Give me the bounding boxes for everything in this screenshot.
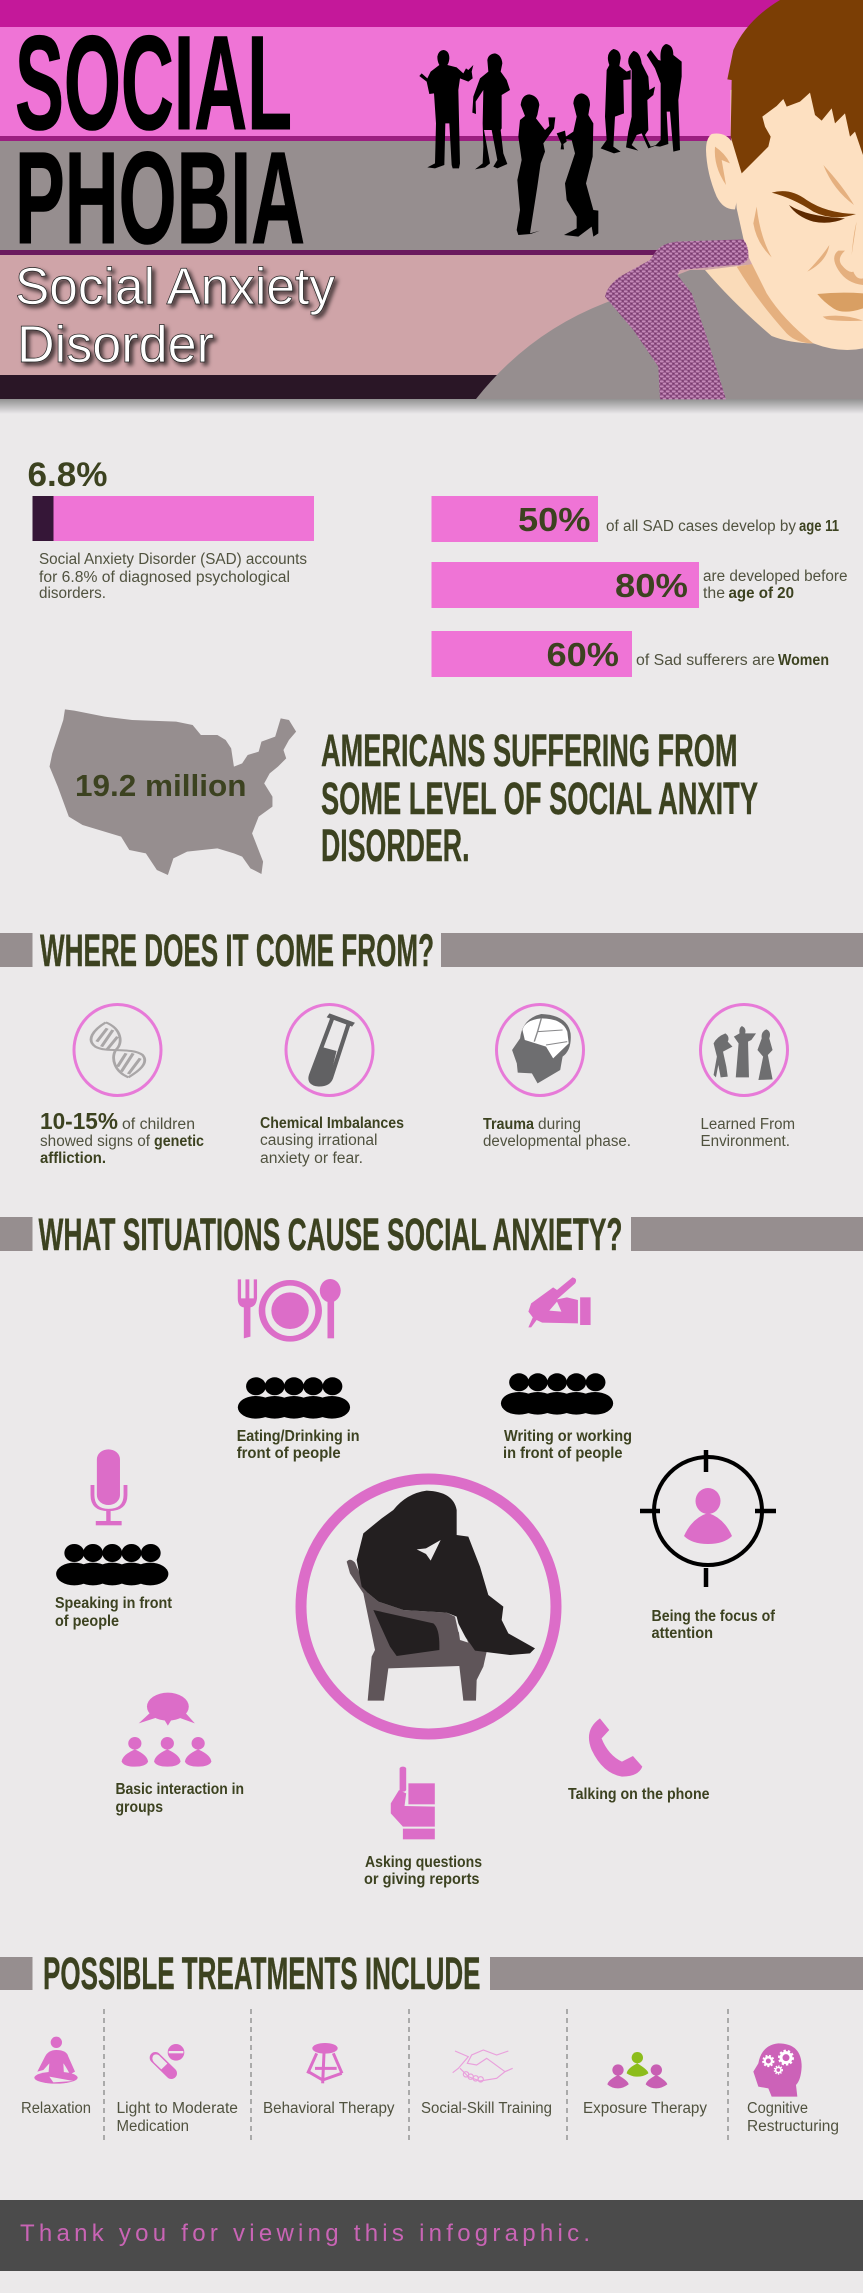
label: Talking on the phone — [568, 1786, 710, 1803]
text — [700, 1116, 795, 1150]
panel: situations — [55, 1277, 776, 1888]
cause: chemical imbalances — [260, 1004, 404, 1167]
situation: writing or working — [501, 1277, 632, 1462]
label — [364, 1854, 482, 1888]
label — [116, 2100, 238, 2135]
text: affliction. — [40, 1150, 106, 1167]
stat: 19.2 million: 19.2 million — [75, 768, 247, 803]
heading: possible treatments include: POSSIBLE TREATMENTS INCLUDE — [43, 1948, 480, 1999]
bar: 80%: the — [703, 585, 725, 602]
icon: stool — [308, 2043, 342, 2083]
label: or giving reports — [364, 1871, 480, 1888]
label: front of people — [237, 1445, 341, 1462]
text — [483, 1116, 631, 1150]
situation: asking questions — [364, 1767, 482, 1888]
icon: handshake — [453, 2050, 513, 2082]
label — [237, 1428, 360, 1462]
label: of people — [55, 1613, 119, 1630]
bar: 80%: age of 20 — [728, 585, 794, 602]
icon: head with brain — [496, 1004, 584, 1096]
bar: share of disorders — [32, 496, 314, 541]
situation: talking on the phone — [568, 1718, 710, 1803]
icon: crowd — [501, 1373, 613, 1415]
treatment: cognitive restructuring — [747, 2043, 839, 2135]
icon: head with gears — [753, 2043, 802, 2097]
description: Social Anxiety Disorder (SAD) accounts — [39, 551, 307, 568]
text: 10-15% — [40, 1108, 118, 1134]
description: disorders. — [39, 585, 106, 602]
icon: microphone — [92, 1449, 125, 1525]
label: Asking questions — [365, 1854, 482, 1871]
illustration: anxious man — [476, 0, 863, 399]
panel: 6.8% statistic — [28, 456, 314, 602]
label: Light to Moderate — [116, 2100, 238, 2117]
cause: environment — [700, 1004, 795, 1150]
label: Being the focus of — [652, 1608, 776, 1625]
thank you text: Thank you for viewing this infographic. — [20, 2220, 590, 2247]
title: Social Phobia: SOCIAL — [15, 9, 292, 158]
label: Cognitive — [747, 2100, 808, 2117]
label: Eating/Drinking in — [237, 1428, 360, 1445]
label: Behavioral Therapy — [263, 2100, 395, 2117]
label — [503, 1428, 632, 1462]
label: Medication — [116, 2118, 189, 2135]
cause: trauma — [483, 1004, 631, 1150]
label: Social-Skill Training — [421, 2100, 552, 2117]
label — [116, 1781, 244, 1816]
panel: causes — [40, 1004, 795, 1167]
bar: 80%: are developed before — [703, 568, 848, 585]
label — [747, 2100, 839, 2135]
treatment: social skill training — [421, 2050, 552, 2117]
text — [260, 1115, 404, 1167]
bar: 60% — [432, 631, 829, 677]
label: Restructuring — [747, 2118, 839, 2135]
bar: 60%: of Sad sufferers are — [636, 652, 775, 669]
heading: where does it come from: WHERE DOES IT COME FROM? — [40, 925, 434, 976]
bar: 80%: 80% — [615, 567, 688, 604]
situation: eating or drinking — [237, 1279, 360, 1462]
centre: person on a chair in a ring — [301, 1479, 556, 1734]
description: for 6.8% of diagnosed psychological — [39, 569, 290, 586]
icon: group with highlighted person — [607, 2052, 667, 2088]
label — [652, 1608, 776, 1642]
title: Social Phobia: PHOBIA — [15, 124, 305, 271]
text: showed signs of — [40, 1133, 151, 1150]
text — [40, 1108, 204, 1167]
icon: three people — [700, 1004, 788, 1096]
subtitle: Social Anxiety Disorder — [15, 258, 335, 374]
situation: focus of attention — [640, 1450, 776, 1642]
label: Basic interaction in — [116, 1781, 244, 1798]
treatment: relaxation — [21, 2037, 91, 2117]
bar: 60%: 60% — [546, 636, 619, 673]
text: of children — [122, 1116, 195, 1133]
icon: speech bubble and three people — [122, 1693, 211, 1767]
bar: 50% — [432, 496, 839, 542]
text: genetic — [154, 1133, 204, 1150]
panel: treatments — [21, 2009, 839, 2142]
situation: group interaction — [116, 1693, 244, 1816]
text: Trauma — [483, 1116, 534, 1133]
bar: 50%: 50% — [518, 501, 590, 538]
icon: target on person — [640, 1450, 776, 1587]
icon: pills — [152, 2044, 184, 2073]
statement — [321, 725, 758, 871]
subtitle: Social Anxiety Disorder: Social Anxiety — [15, 258, 335, 316]
stat number: 6.8% — [28, 456, 108, 494]
icon: crowd — [238, 1377, 350, 1419]
treatment: medication — [116, 2044, 238, 2135]
icon: test tube — [286, 1004, 373, 1096]
icon: map of the USA — [50, 709, 296, 875]
treatment: exposure therapy — [583, 2052, 707, 2117]
label: Writing or working — [504, 1428, 632, 1445]
text: during — [538, 1116, 581, 1133]
text: developmental phase. — [483, 1133, 631, 1150]
text: Chemical Imbalances — [260, 1115, 404, 1132]
bar: 60%: Women — [778, 652, 829, 669]
icon: writing hand — [528, 1277, 591, 1327]
icon: meditating figure — [34, 2037, 78, 2084]
label: groups — [116, 1799, 163, 1816]
label: Exposure Therapy — [583, 2100, 707, 2117]
panel: percentage bars — [432, 496, 848, 677]
label: attention — [652, 1625, 713, 1642]
icon: pointing hand — [391, 1767, 435, 1839]
cause: genetics — [40, 1004, 204, 1167]
label: in front of people — [503, 1445, 623, 1462]
situation: speaking in front of people — [55, 1449, 172, 1630]
text: Learned From — [700, 1116, 795, 1133]
panel: 19.2 million Americans — [50, 709, 758, 875]
icon: crowd — [56, 1544, 168, 1585]
label: Speaking in front — [55, 1595, 172, 1612]
bar: 50%: age 11 — [799, 518, 839, 535]
icon: DNA helix — [74, 1004, 161, 1096]
treatment: behavioral therapy — [263, 2043, 395, 2117]
bar: 80% — [432, 562, 848, 608]
label: Relaxation — [21, 2100, 91, 2117]
bar: 50%: of all SAD cases develop by — [606, 518, 796, 535]
text: Environment. — [700, 1133, 790, 1150]
panel: footer — [0, 2200, 863, 2271]
subtitle: Social Anxiety Disorder: Disorder — [17, 316, 214, 374]
text: anxiety or fear. — [260, 1150, 363, 1167]
panel: header banner — [0, 0, 863, 414]
text: causing irrational — [260, 1132, 378, 1149]
icon: telephone handset — [589, 1718, 642, 1777]
icon: plate and cutlery — [238, 1279, 341, 1342]
title: Social Phobia — [15, 9, 305, 271]
label — [55, 1595, 172, 1630]
statement: DISORDER. — [321, 820, 470, 871]
illustration: party silhouettes — [419, 44, 682, 237]
description — [39, 551, 307, 602]
